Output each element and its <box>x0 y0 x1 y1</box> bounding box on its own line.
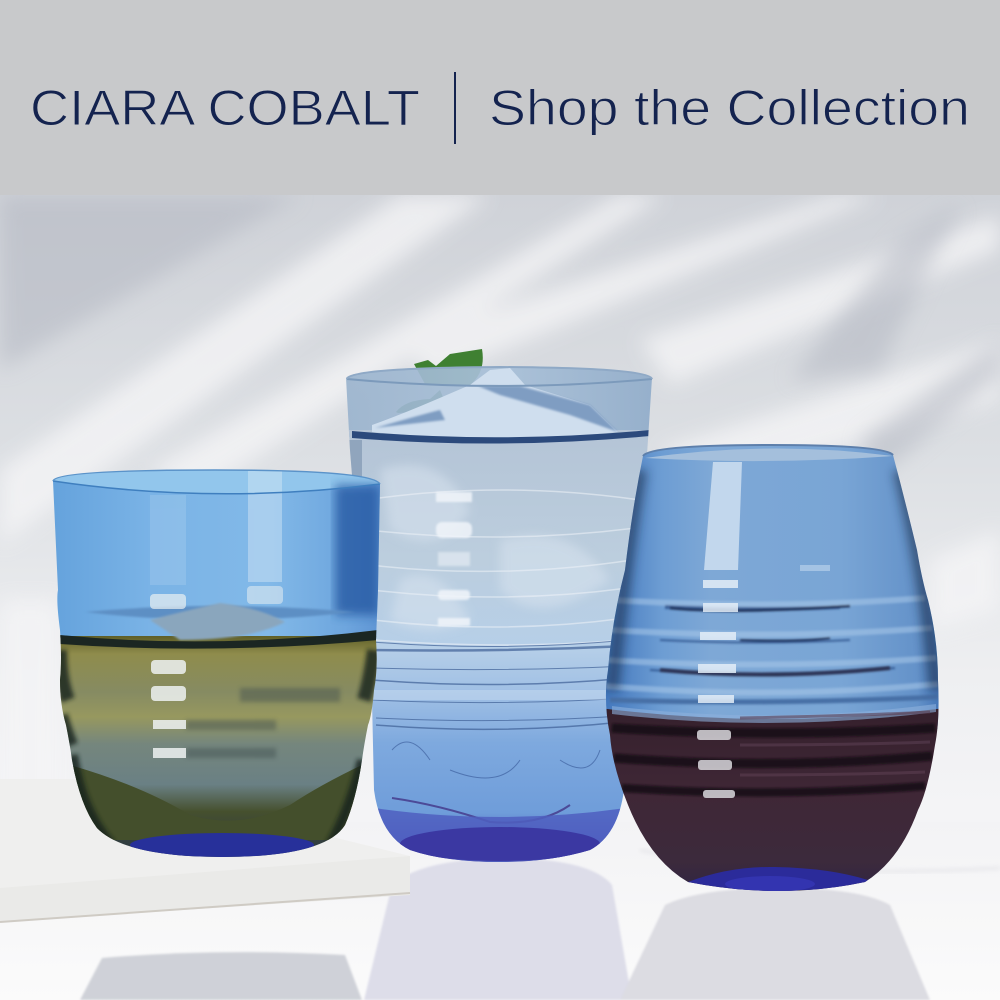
glass reflections on table <box>80 858 930 1000</box>
marble table surface <box>0 822 1000 1000</box>
ice <box>372 368 618 438</box>
glass: left olive rocks glass <box>50 468 385 861</box>
divider <box>454 72 456 144</box>
mint leaf <box>396 349 483 413</box>
header banner <box>0 0 1000 195</box>
glass: center water glass with ice and mint <box>340 349 660 865</box>
marble coaster <box>0 779 410 922</box>
glass: right plum stemless glass <box>600 444 945 900</box>
photo background: wall with leaf shadows <box>0 195 1000 840</box>
heading: shop link: Shop the Collection <box>489 80 970 136</box>
heading: collection name: CIARA COBALT <box>30 80 420 136</box>
